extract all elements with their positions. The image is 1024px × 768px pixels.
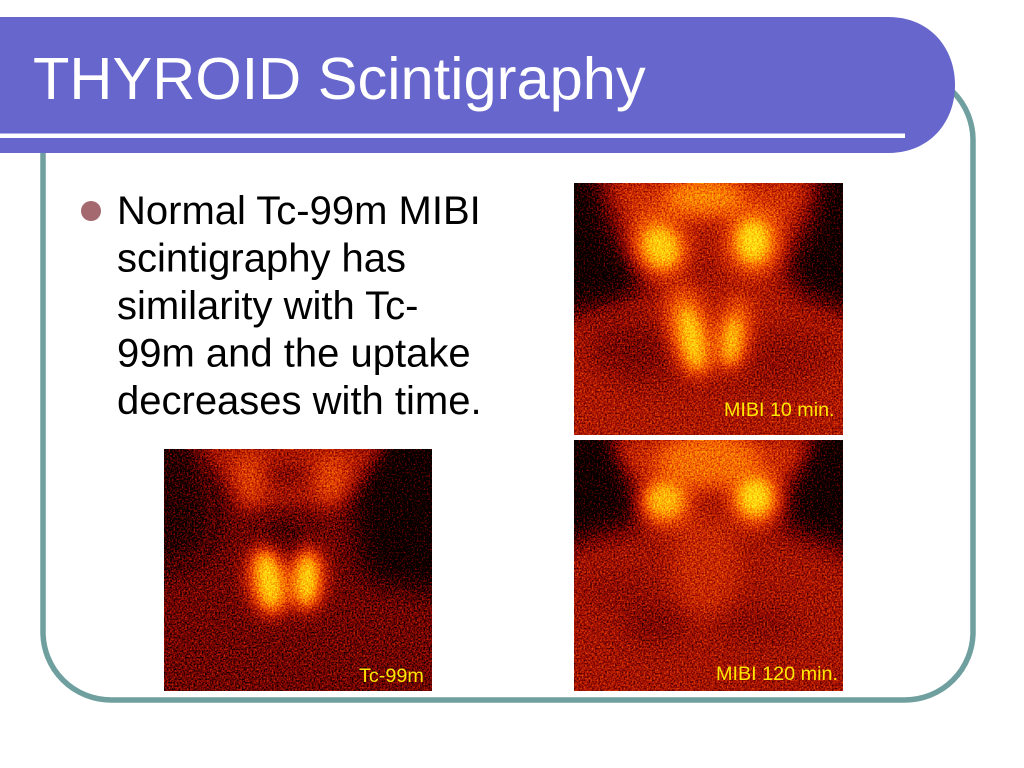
bullet text: decreases with time. bbox=[117, 379, 482, 423]
bullet text: similarity with Tc- bbox=[117, 284, 419, 328]
bullet text: scintigraphy has bbox=[117, 236, 406, 280]
bullet text: Normal Tc-99m MIBI bbox=[117, 189, 481, 233]
image label: MIBI 10 min. bbox=[724, 399, 835, 421]
bullet text: 99m and the uptake bbox=[117, 332, 471, 376]
bullet text block bbox=[81, 189, 492, 423]
title: THYROID Scintigraphy bbox=[33, 45, 646, 112]
image label: MIBI 120 min. bbox=[716, 663, 838, 685]
scan image: Tc-99m bbox=[164, 449, 432, 691]
scan image: MIBI 120 min bbox=[574, 440, 843, 691]
image label: Tc-99m bbox=[359, 665, 424, 687]
title underline bbox=[0, 134, 905, 138]
content frame bbox=[43, 72, 973, 700]
scan image: MIBI 10 min bbox=[574, 183, 843, 435]
bullet marker bbox=[81, 201, 101, 221]
title banner bbox=[0, 17, 955, 153]
